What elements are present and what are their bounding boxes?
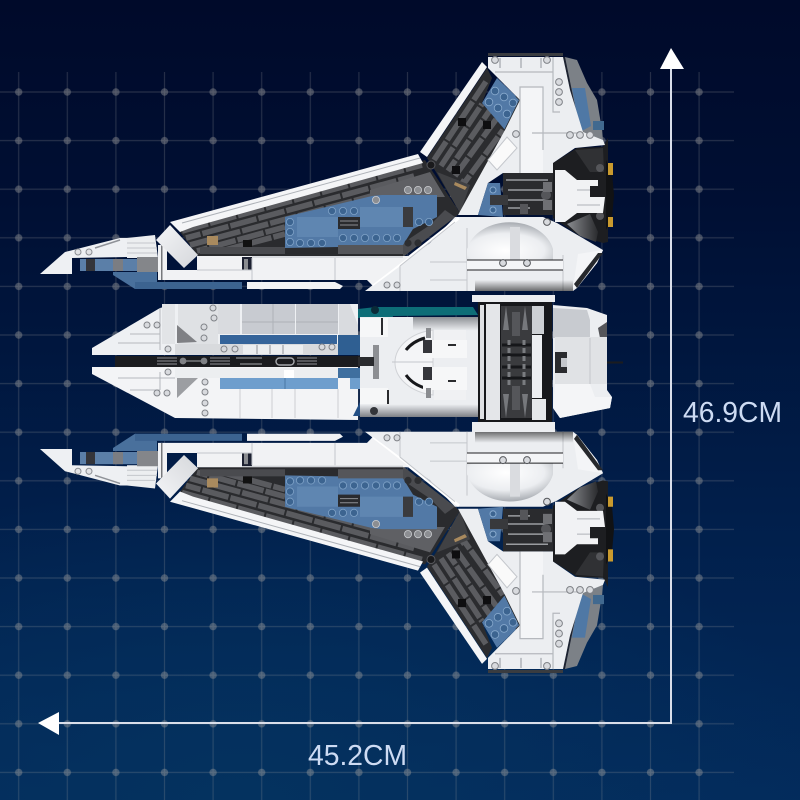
angled white block: [156, 225, 198, 268]
nose underside: [80, 257, 343, 289]
top wing: [40, 53, 614, 291]
bottom wing: [40, 432, 614, 673]
height label: 46.9CM: [683, 397, 782, 429]
central fuselage: [92, 295, 623, 432]
rear leading edge strip: [420, 62, 487, 157]
rear dark wing plating: [427, 68, 505, 213]
forward dark wing plating: [177, 160, 460, 257]
forward body strake: [158, 245, 410, 285]
width label: 45.2CM: [308, 740, 407, 772]
mid fuselage body: [358, 317, 478, 417]
fuselage nose upper: [92, 304, 360, 355]
grey studs: [372, 186, 432, 204]
width dimension arrow: [38, 712, 672, 735]
teal top plate: [358, 306, 478, 332]
forward leading edge strip: [170, 154, 423, 232]
blue stud panels: [285, 186, 437, 248]
central spine: [115, 356, 380, 367]
rear engine housing: [553, 138, 614, 243]
height dimension arrow: [660, 48, 684, 724]
rear white hull: [458, 53, 605, 215]
studs on blue panels: [286, 207, 433, 247]
dome: [467, 222, 563, 270]
cockpit canopy blocks: [423, 328, 467, 400]
engine nozzle bracket: [544, 170, 605, 225]
lower white hull: [365, 217, 603, 291]
hull studs: [492, 57, 593, 138]
nose tip: [40, 235, 158, 274]
engine bay: [478, 173, 553, 217]
central ring section: [472, 295, 555, 432]
cockpit dome: [392, 330, 433, 395]
fuselage nose lower: [92, 367, 375, 420]
tail fin panels: [563, 57, 604, 140]
blue stud plate: [482, 78, 520, 130]
tail section: [553, 305, 623, 418]
